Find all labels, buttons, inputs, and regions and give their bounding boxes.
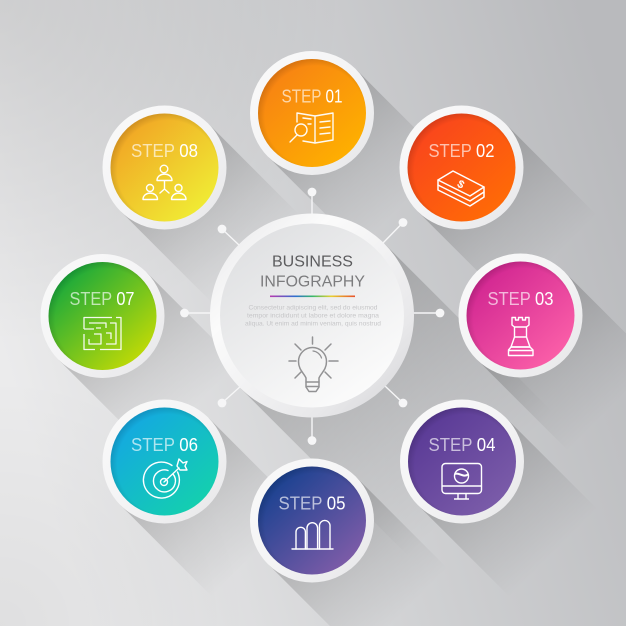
label: STEP 05 — [278, 494, 346, 514]
heading: INFOGRAPHY — [260, 274, 365, 290]
heading: BUSINESS — [272, 254, 353, 270]
panel: center circle — [210, 214, 414, 418]
panel: step 06 — [102, 400, 226, 524]
icon: money stack: $ — [455, 178, 466, 192]
label: STEP 06 — [131, 435, 198, 455]
icon: target and arrow — [143, 459, 187, 498]
panel: step 01 — [250, 51, 374, 175]
connectors — [180, 188, 444, 445]
body text — [245, 306, 381, 328]
label: STEP 03 — [488, 289, 554, 309]
heading — [260, 254, 365, 290]
panel: step 05 — [250, 458, 374, 582]
label: STEP 08 — [131, 141, 198, 161]
icon: book and magnifier — [290, 113, 333, 143]
body text: tempor incididunt ut labore et dolore magna — [247, 314, 380, 320]
icon: bar chart arches — [292, 520, 333, 549]
icon: maze — [84, 318, 121, 350]
label: STEP 02 — [428, 141, 494, 161]
panel: step 07 — [40, 254, 164, 378]
panel: step 08 — [102, 106, 226, 230]
label: STEP 04 — [428, 435, 496, 455]
icon: chess rook — [508, 318, 533, 356]
rainbow divider — [270, 296, 355, 297]
panel: step 03 — [458, 254, 582, 378]
body text: Consectetur adipiscing elit, sed do eiusmod — [248, 306, 378, 312]
label: STEP 07 — [70, 289, 134, 309]
icon: light bulb — [289, 337, 338, 392]
panel: step 04 — [400, 400, 524, 524]
label: STEP 01 — [282, 86, 342, 106]
body text: aliqua. Ut enim ad minim veniam, quis nostrud — [245, 322, 381, 328]
icon: team hierarchy — [143, 165, 186, 200]
panel: step 02 — [400, 106, 524, 230]
icon: monitor — [442, 464, 482, 499]
